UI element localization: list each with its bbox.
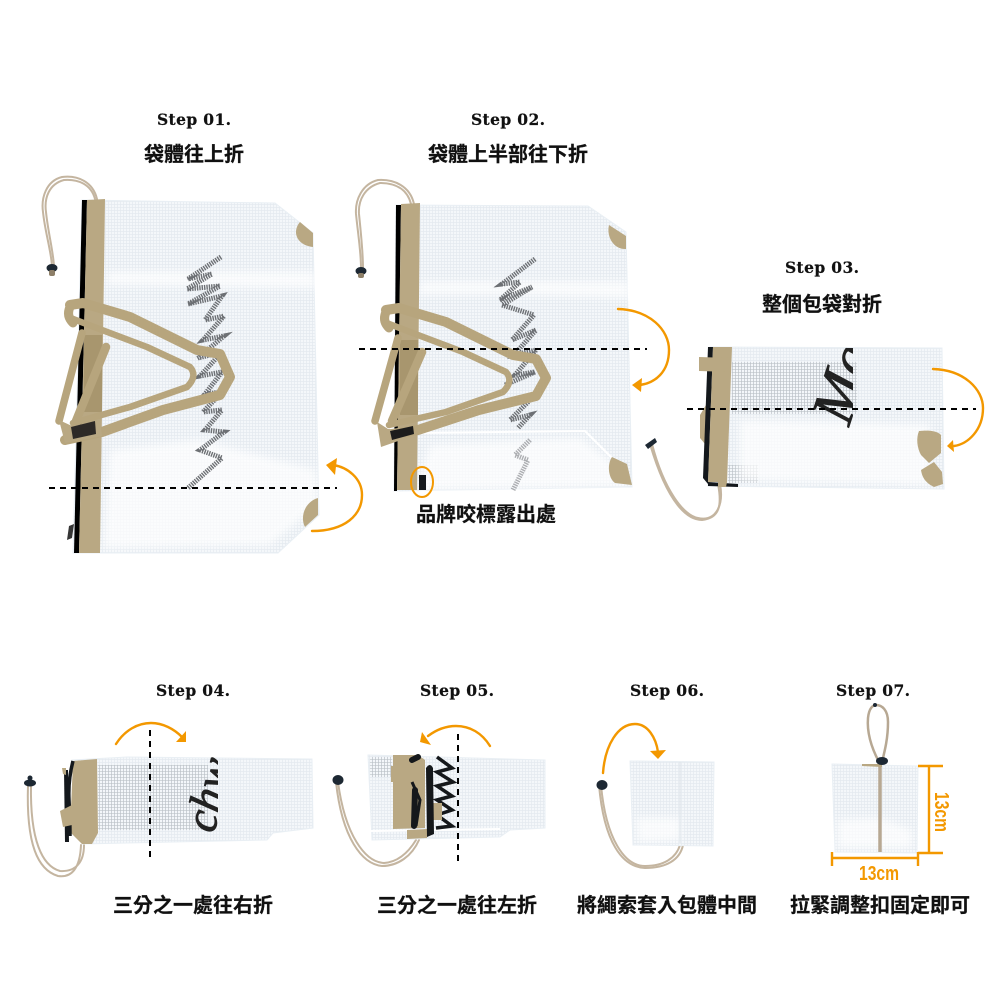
fold line: step 05 (457, 734, 459, 865)
fold line: step 03 (687, 408, 976, 410)
arrow: step 01 (312, 458, 362, 531)
caption: step 05: 三分之一處往左折 (377, 893, 537, 917)
arrow: step 04 (116, 723, 186, 744)
bag: step 05 (332, 755, 545, 866)
arrow: step 06 (603, 724, 666, 773)
arrow: step 05 (420, 726, 490, 746)
bag: step 07 (832, 703, 918, 853)
bag: step 03 (645, 335, 944, 520)
step 06 title: Step 06. (630, 681, 704, 700)
dimension: width 13cm (832, 852, 918, 885)
fold line: step 01 (49, 487, 337, 489)
step 01 title: Step 01. (157, 110, 231, 129)
bag: step 02 (356, 180, 632, 491)
step 02 caption: 袋體上半部往下折 (428, 143, 588, 166)
step 01 caption: 袋體往上折 (144, 143, 244, 166)
bag: step 04 (24, 752, 313, 876)
step 07 title: Step 07. (836, 681, 910, 700)
dimension: height 13cm (918, 766, 952, 853)
step 03 caption: 整個包袋對折 (762, 293, 882, 316)
step 02 title: Step 02. (471, 110, 545, 129)
arrow: step 02 (618, 309, 669, 392)
step 03 title: Step 03. (785, 258, 859, 277)
dimension: height 13cm: 13cm (930, 792, 952, 832)
dimension: width 13cm: 13cm (859, 863, 899, 885)
fold line: step 02 (359, 348, 647, 350)
step 05 title: Step 05. (420, 681, 494, 700)
bag: step 06 (596, 761, 714, 868)
bag: step 01 (43, 177, 319, 553)
caption: step 07: 拉緊調整扣固定即可 (790, 893, 970, 917)
fold line: step 04 (149, 730, 151, 861)
caption: step 04: 三分之一處往右折 (113, 893, 273, 917)
arrow: step 03 (933, 369, 983, 452)
caption: step 06: 將繩索套入包體中間 (577, 894, 757, 917)
callout ring: brand tag (411, 467, 433, 497)
bag: step 03: Ma (798, 335, 886, 432)
callout text: brand tag: 品牌咬標露出處 (416, 502, 556, 526)
step 04 title: Step 04. (156, 681, 230, 700)
bag: step 04: chw (174, 752, 242, 836)
